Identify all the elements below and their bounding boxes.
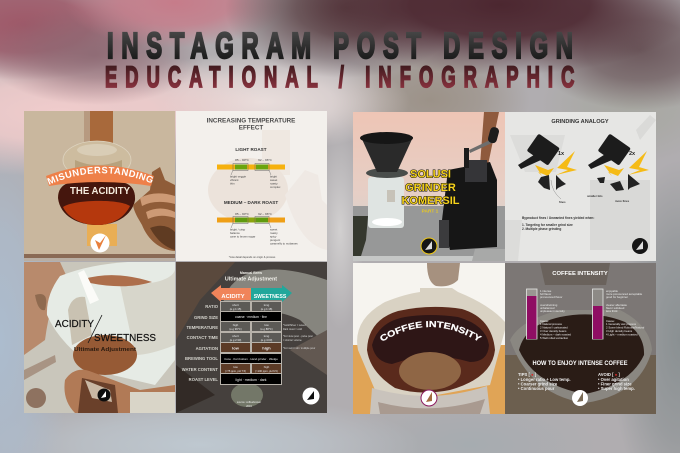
table: high <box>262 346 271 350</box>
text: left gauge: Cause: <box>540 319 549 323</box>
rock pieces 2 <box>597 174 640 191</box>
icon: logo <box>421 238 437 254</box>
text: left gauge: pronounced flavor <box>540 295 562 299</box>
explanation text <box>522 216 594 231</box>
row labels: AGITATION <box>196 346 218 351</box>
explanation text: 1. Targeting for smaller grind size <box>522 223 573 227</box>
leader labels <box>587 194 630 203</box>
table: short <box>232 334 239 338</box>
impact 1 <box>535 151 577 176</box>
text: left gauge: 1 Natural process <box>540 322 563 326</box>
avoid <box>598 372 635 391</box>
credit: 2019 <box>246 404 252 408</box>
table: low <box>233 365 239 369</box>
table: (e.g 1:15) <box>230 307 241 311</box>
text: left gauge: unpleasant intensity <box>540 309 565 313</box>
icon: logo <box>302 388 320 404</box>
row labels: GRIND SIZE <box>194 315 218 320</box>
heading: COFFEE INTENSITY <box>552 271 608 277</box>
heading: instagram post design: INSTAGRAM POST DESIGN <box>107 26 573 66</box>
light roast chart: 85 – 90°C <box>235 158 250 162</box>
table: high <box>233 323 239 327</box>
heading: INCREASING TEMPERATURE <box>207 118 295 124</box>
fines label: fines <box>559 200 566 204</box>
light roast chart: 92 – 96°C <box>258 158 273 162</box>
row labels: BREWING TOOL <box>185 356 218 361</box>
label 2x: 2x <box>629 151 636 157</box>
arrow: sweetness <box>251 285 292 302</box>
medium dark roast chart: bright / crisp <box>230 228 246 232</box>
medium dark roast chart: spicy <box>270 234 277 238</box>
medium dark roast chart: 92 – 96°C <box>258 212 273 216</box>
tips: • Longer ratio + Low temp. <box>518 377 571 382</box>
heading: KOMERSIL <box>401 195 460 207</box>
row labels: CONTACT TIME <box>187 335 218 340</box>
avoid: • Super high temp. <box>598 386 635 391</box>
light roast chart: sweet <box>270 178 278 182</box>
panel: acidity sweetness <box>24 262 175 413</box>
heading: GRINDING ANALOGY <box>551 119 609 125</box>
row labels: RATIO <box>205 304 219 309</box>
tips: • Coarser grind size <box>518 382 558 386</box>
heading: EFFECT <box>239 124 263 132</box>
light roast chart: bright <box>270 174 277 178</box>
table <box>220 301 282 385</box>
table: long <box>264 334 270 338</box>
avoid: • Finer grind size <box>598 382 632 386</box>
table: low <box>232 346 240 350</box>
part label: PART 1 <box>422 208 439 214</box>
row labels <box>182 304 219 382</box>
icon: logo <box>632 238 648 254</box>
dripper <box>360 132 413 178</box>
table: coarse · medium · fine <box>235 315 267 319</box>
light roast chart: roasty <box>270 182 278 186</box>
gauge: right <box>592 289 603 339</box>
explanation text: Byproduct fines / Unwanted fines yielded when: <box>522 216 594 220</box>
table: (e.g 88°C) <box>260 327 273 331</box>
text: right gauge: more pronounced acceptable <box>606 292 643 296</box>
light roast chart <box>217 147 285 189</box>
text: left gauge: 5 Well rolled extraction <box>540 336 569 340</box>
text: left gauge: 1 intense <box>540 289 552 293</box>
table: (<75 ppm, pH 7.5) <box>225 369 246 373</box>
heading: Ultimate Adjustment <box>225 276 277 282</box>
panel: misunderstanding the acidity <box>24 111 175 261</box>
medium dark roast chart <box>217 200 298 246</box>
side notes: = shorter volume <box>283 339 302 342</box>
label 1x: 1x <box>558 151 565 157</box>
table: (e.g 96°C) <box>229 327 242 331</box>
explanation text: 2. Multiple phase grinding <box>522 227 561 231</box>
table: (e.g 4:00) <box>261 338 272 342</box>
impact 2 <box>604 151 649 176</box>
side notes: *Gold/Silver = sweet <box>283 324 306 327</box>
medium dark roast chart: 85 – 90°C <box>235 212 250 216</box>
panel: coffee intensity photo <box>353 263 505 414</box>
side notes <box>283 324 315 350</box>
medium dark roast chart: caramelly to molasses <box>270 242 298 246</box>
tips: • Continuous pour <box>518 386 555 391</box>
text: left gauge: 4 Medium – dark roasted <box>540 332 571 336</box>
credit: source: coffeebrewer <box>237 400 261 404</box>
rock pieces 1 <box>538 175 566 190</box>
heading <box>207 118 295 132</box>
light roast chart: complex <box>270 185 281 189</box>
grinder <box>439 126 500 250</box>
heading: how to enjoy: HOW TO ENJOY INTENSE COFFEE <box>532 361 628 367</box>
leader labels: smaller bits <box>587 194 603 198</box>
heading: acidity: ACIDITY <box>55 318 94 330</box>
title <box>105 26 575 94</box>
text: right gauge: enjoyable <box>606 289 618 293</box>
table: light · medium · dark <box>236 378 267 382</box>
table: (e.g 1:18) <box>261 307 272 311</box>
table: Cone · Kurt bottom · Hand grinder · Wedge <box>224 357 278 361</box>
row labels: TEMPERATURE <box>186 325 218 330</box>
tips: TIPS [ ● ] <box>518 372 537 377</box>
text: left gauge: full flavor <box>540 292 551 296</box>
hammer 2 <box>588 134 631 169</box>
heading <box>401 168 460 207</box>
text: right gauge: good for beginner <box>606 295 628 299</box>
slash <box>88 315 102 343</box>
text: left gauge: 3 Over density beans <box>540 329 567 333</box>
table: (e.g 2:30) <box>230 338 241 342</box>
gauge: left <box>526 289 537 339</box>
medium dark roast chart: balance <box>230 231 240 235</box>
arrow: sweetness: SWEETNESS <box>254 294 287 300</box>
light roast chart: bright veggie <box>230 174 246 178</box>
banner <box>46 166 154 186</box>
panel: coffee intensity guide <box>505 263 656 414</box>
icon: logo <box>90 234 110 252</box>
leader labels: more fines <box>615 199 630 203</box>
row labels: ROAST LEVEL <box>189 377 218 382</box>
credit <box>237 400 261 408</box>
table: long <box>264 303 270 307</box>
handle / mug <box>64 370 175 413</box>
text: right gauge: 2 Some blend Robusta/Natural <box>606 326 645 330</box>
row labels: WATER CONTENT <box>182 367 218 372</box>
text: right gauge: clearer aftertaste <box>606 303 627 307</box>
icon: logo <box>421 390 437 406</box>
banner text: MISUNDERSTANDING <box>47 166 153 185</box>
text: right gauge: 1 Generally wet process <box>606 322 637 326</box>
subtitle: Ultimate Adjustment <box>74 347 136 353</box>
small cup <box>353 216 368 256</box>
text: left gauge: 2 Natural / carbonated <box>540 326 568 330</box>
text: right gauge: Cause: <box>606 319 615 323</box>
avoid: AVOID [ ● ] <box>598 372 620 377</box>
light roast chart: thin <box>230 182 235 186</box>
white filter cone <box>47 261 175 385</box>
medium dark roast chart: roasty <box>270 231 278 235</box>
medium dark roast chart: sweet <box>270 228 278 232</box>
light roast chart: vibrant <box>230 178 239 182</box>
heading: GRINDER <box>405 182 456 194</box>
text: right gauge <box>606 289 645 336</box>
glass server <box>368 177 404 228</box>
text: left gauge: overwhelming <box>540 303 558 307</box>
panel: solusi grinder komersil <box>353 112 505 261</box>
medium dark roast chart: MEDIUM – DARK ROAST <box>224 200 278 205</box>
arrow: acidity <box>211 285 251 302</box>
tips <box>518 372 571 391</box>
heading: Manual Brew <box>240 271 262 275</box>
medium dark roast chart: cane to brown sugar <box>230 234 255 238</box>
heading: educational / infographic: EDUCATIONAL / INFOGRAPHIC <box>105 62 575 94</box>
medium dark roast chart: pungent <box>270 238 280 242</box>
text: left gauge: unbalanced <box>540 306 555 310</box>
light roast chart: LIGHT ROAST <box>235 147 267 152</box>
hammer 1 <box>518 134 560 169</box>
table: short <box>232 303 239 307</box>
table: high <box>264 365 270 369</box>
text: left gauge <box>540 289 571 340</box>
side notes: *For slow pour - pulse pour <box>283 335 313 338</box>
text: right gauge: 3 High density beans <box>606 329 633 333</box>
text: right gauge: less thick <box>606 309 618 313</box>
panel: grinding analogy <box>505 112 656 261</box>
subtitle: THE ACIDITY <box>70 186 130 197</box>
panel: ultimate adjustment table <box>176 262 327 413</box>
avoid: • Over agitation <box>598 377 629 382</box>
heading: sweetness: SWEETNESS <box>94 332 156 344</box>
side notes: Dark roast = cold <box>283 328 303 331</box>
panel: increasing temperature effect <box>176 111 327 261</box>
heading <box>225 271 277 282</box>
text: right gauge: 4 Light – medium roasted <box>606 332 638 336</box>
hand <box>133 167 175 251</box>
footnote: *note detail depends on origin & process <box>229 255 276 259</box>
table: (>100 ppm, pH 6.5) <box>255 369 278 373</box>
arrow: acidity: ACIDITY <box>221 294 245 300</box>
curved heading: COFFEE INTENSITY <box>380 320 482 341</box>
icon: logo <box>572 390 588 406</box>
table: low <box>264 323 270 327</box>
side notes: *For swirl / stir / multiple pour <box>283 347 315 350</box>
text: right gauge: flavor subdued <box>606 306 625 310</box>
heading: SOLUSI <box>410 168 451 180</box>
icon: logo <box>98 388 110 402</box>
